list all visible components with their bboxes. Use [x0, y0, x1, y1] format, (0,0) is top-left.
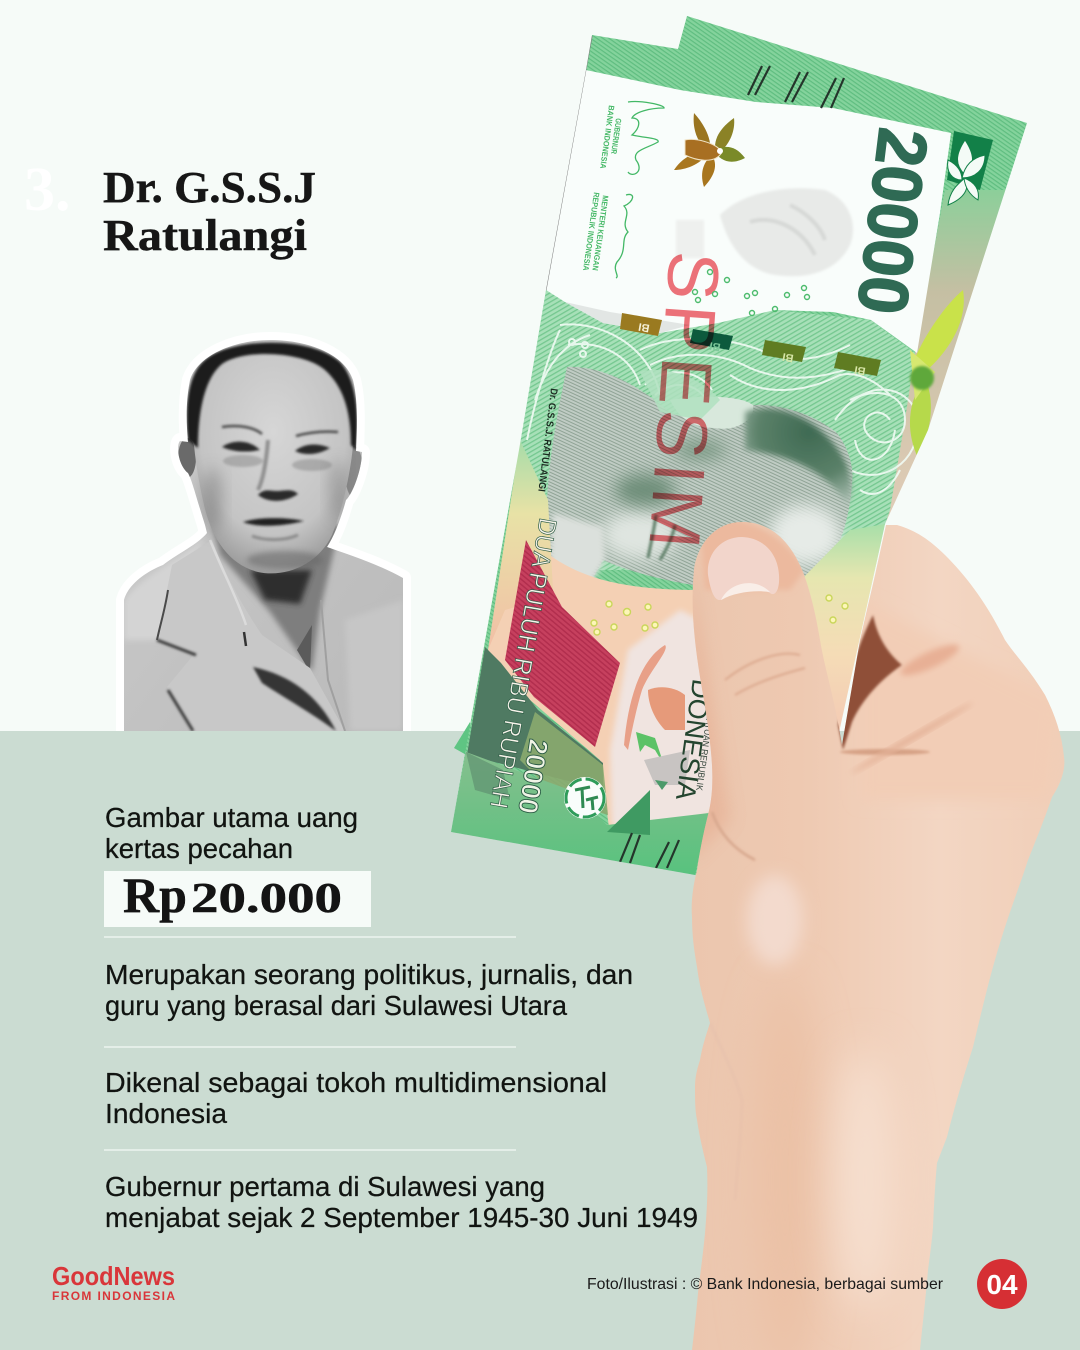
title: Ratulangi [103, 211, 307, 260]
hand holding the note [680, 510, 1080, 1350]
BI tags: BI [854, 363, 867, 377]
page number badge [977, 1259, 1027, 1309]
soft cheek shadows [203, 468, 221, 532]
photo credit: Foto/Ilustrasi : © Bank Indonesia, berbagai sumber [587, 1276, 944, 1293]
note base texture [440, 0, 1040, 900]
value box Rp20.000 [104, 867, 371, 927]
text: lead label [105, 802, 358, 864]
thumb tone [690, 560, 730, 860]
tiny rings [692, 270, 810, 316]
neck and collar shadow [212, 525, 340, 672]
small note captions: MENTERI KEUANGAN [590, 195, 610, 271]
batik accent near collar [640, 370, 720, 420]
crown of hair [745, 408, 851, 505]
shaded band under white [565, 302, 690, 333]
lower background panel [0, 731, 1080, 1350]
specimen overprint: SPESIM [633, 249, 734, 556]
collar pale [550, 511, 608, 578]
ear [670, 397, 753, 429]
note name caption: Dr. G.S.S.J. RATULANGI [535, 388, 559, 492]
pale map area [610, 610, 720, 838]
country name: DONESIA [670, 677, 717, 802]
forearm darker band [753, 980, 817, 1350]
green corner square [947, 131, 993, 190]
banknote Rp20.000 [440, 0, 1040, 900]
yellow-green orchid on the strip [910, 290, 964, 458]
white front area [546, 70, 951, 353]
watermark portrait [676, 188, 853, 276]
thumb nail [708, 537, 779, 600]
forehead [769, 505, 841, 565]
text: description 1: Merupakan seorang politikus, jurnalis, dan [105, 959, 633, 990]
BI tags [620, 313, 881, 377]
ears [178, 438, 196, 478]
yellow pink right side [804, 524, 885, 730]
logo GoodNews from Indonesia [52, 1261, 175, 1303]
heading number: 3. [24, 156, 70, 224]
shoulder shading [124, 543, 200, 640]
small note captions: GUBERNUR [609, 118, 623, 155]
big denomination 20000: 20000 [842, 124, 943, 318]
peach lower area [488, 556, 709, 825]
small note captions: REPUBLIK INDONESIA [581, 192, 601, 271]
dark green wedge [467, 647, 603, 790]
banknote Rp20.000: SATUAN REPUBLIK [694, 713, 715, 791]
brown orchid [674, 113, 745, 187]
BI tags: BI [709, 339, 722, 353]
cheek and nose [602, 511, 678, 559]
back of hand tone [860, 600, 1060, 800]
title [103, 163, 316, 260]
central batik band [520, 290, 915, 570]
palm creases and shading [840, 749, 930, 755]
hair [187, 343, 357, 450]
text: description 3: menjabat sejak 2 September 1945-30 Juni 1949 [105, 1202, 698, 1233]
small 20000: 20000 [512, 737, 554, 816]
text: lead label: kertas pecahan [105, 833, 293, 864]
BI tags: BI [782, 350, 795, 364]
bottom green [451, 752, 709, 875]
signatures [615, 102, 664, 278]
map islands [624, 645, 666, 750]
text: description 2: Indonesia [105, 1098, 227, 1129]
small note captions [581, 105, 623, 271]
eyes and brows [222, 426, 338, 540]
portrait photo of Dr. Ratulangi [110, 330, 410, 760]
text: description 3: Gubernur pertama di Sulawesi yang [105, 1171, 545, 1202]
text: lead label: Gambar utama uang [105, 802, 358, 833]
page number badge: 04 [986, 1269, 1018, 1300]
wrist crease [710, 1023, 742, 1200]
logo GoodNews from Indonesia: FROM INDONESIA [52, 1289, 175, 1303]
right strip [880, 190, 1012, 530]
finger shadow [838, 615, 902, 750]
face [194, 387, 353, 574]
mouth [243, 518, 304, 526]
portrait of Ratulangi on the note [547, 366, 852, 585]
logo GoodNews from Indonesia: GoodNews [52, 1261, 175, 1291]
value box Rp20.000: 20.000 [191, 876, 342, 922]
note top edge line [546, 36, 592, 290]
nose [258, 490, 298, 501]
BI tags: BI [638, 320, 651, 334]
title: Dr. G.S.S.J [103, 163, 316, 212]
text: description 2: Dikenal sebagai tokoh multidimensional [105, 1067, 607, 1098]
security mark circle [564, 777, 606, 819]
back note stub at left [454, 722, 470, 757]
left yellow strip [488, 440, 553, 650]
small note captions: BANK INDONESIA [598, 105, 616, 170]
words in Indonesian: DUA PULUH RIBU RUPIAH [484, 516, 562, 810]
batik contour lines [527, 324, 918, 494]
red wedge [505, 540, 620, 747]
serial tick marks [620, 66, 844, 868]
text: description 2 [105, 1067, 607, 1129]
text: description 1 [105, 959, 633, 1021]
text: description 1: guru yang berasal dari Sulawesi Utara [105, 990, 567, 1021]
lapels [157, 540, 345, 731]
forearm highlight [835, 1050, 895, 1310]
small white flower [948, 140, 985, 205]
text: description 3 [105, 1171, 698, 1233]
value box Rp20.000: Rp [123, 867, 187, 923]
